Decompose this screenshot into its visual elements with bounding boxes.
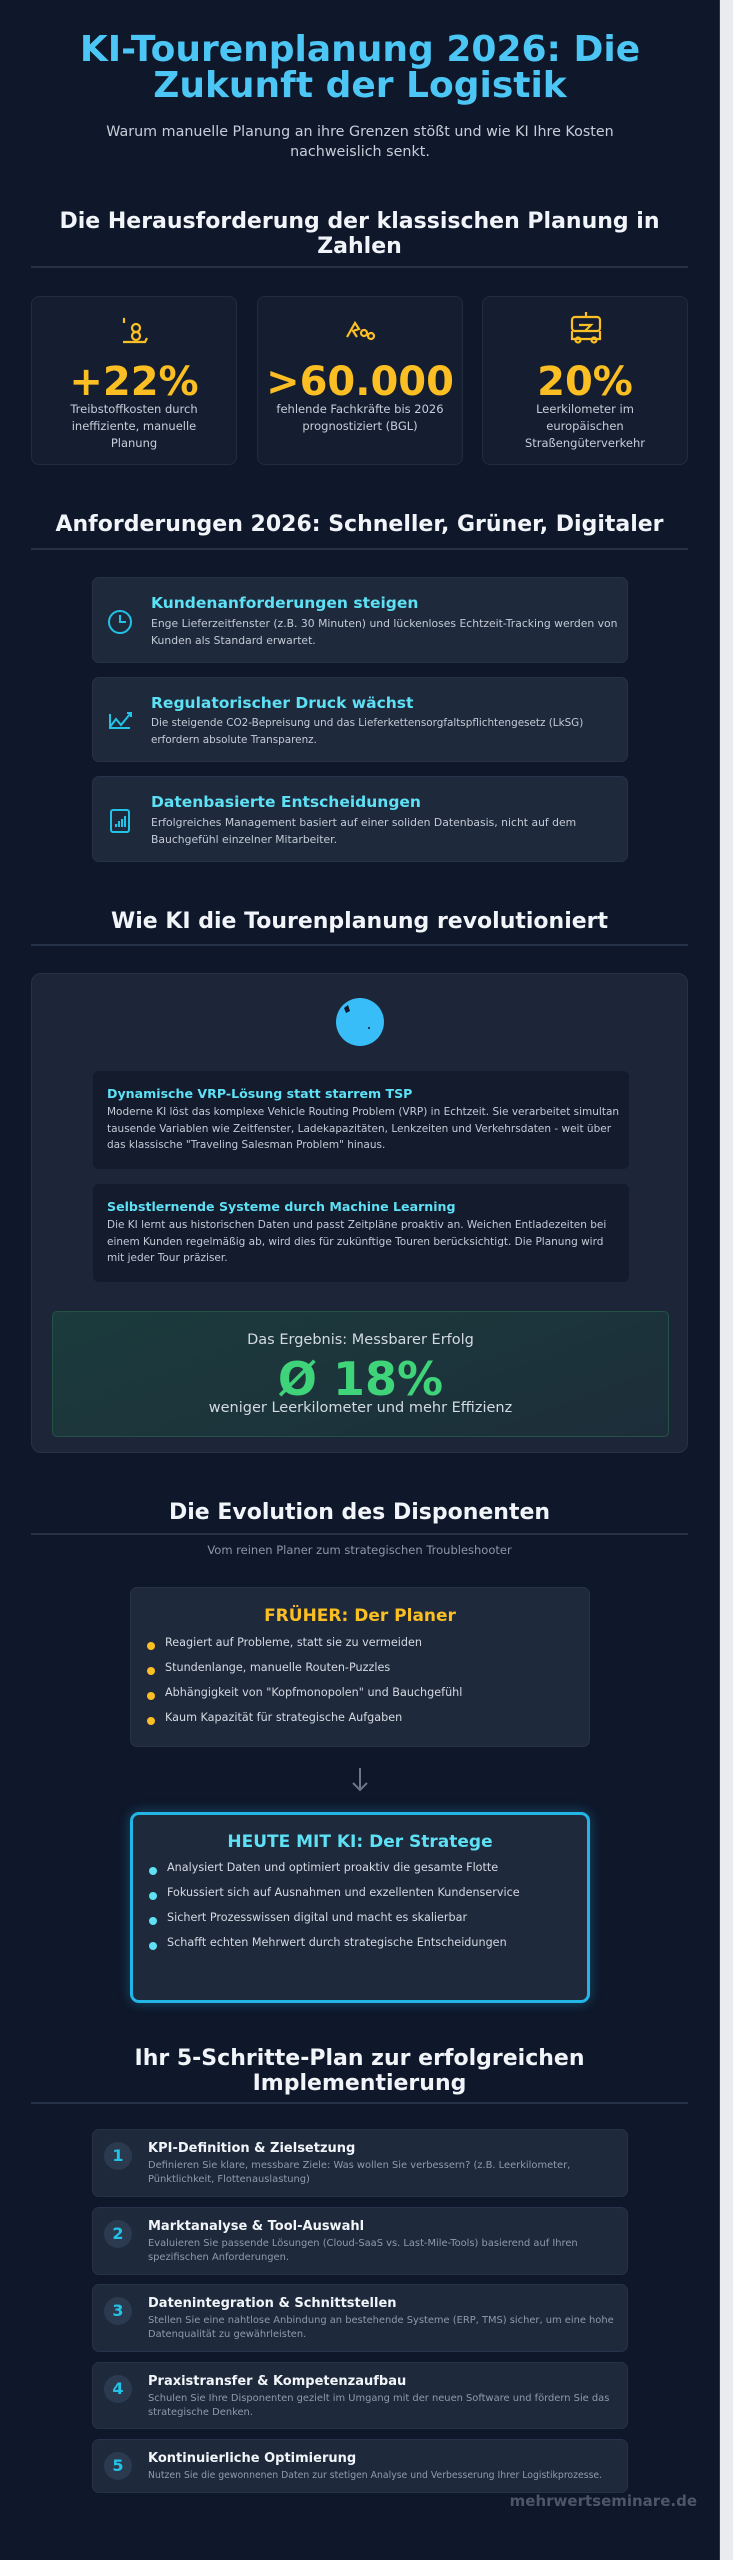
- step 1: [92, 2129, 628, 2197]
- footer brand: mehrwertseminare.de: [510, 2492, 697, 2510]
- step 5: Nutzen Sie die gewonnenen Daten zur stetigen Analyse und Verbesserung Ihrer Logistikprozesse.: [148, 2470, 602, 2481]
- title: KI-Tourenplanung 2026: Die: [80, 29, 640, 70]
- sub-card: Machine Learning: Die KI lernt aus historischen Daten und passt Zeitpläne proaktiv an. Weichen Entladezeiten bei einem Kunden regelmäßig ab, wird dies für zukünftige Touren berücksichtigt. Die Planung wird mit jeder Tour präziser.: [107, 1219, 606, 1264]
- step 3: Datenintegration & Schnittstellen: [148, 2296, 397, 2311]
- panel: früher: FRÜHER: Der Planer: [264, 1606, 456, 1626]
- panel: KI revolution: [31, 973, 688, 1453]
- title: Zukunft der Logistik: [153, 65, 567, 106]
- step 4: [92, 2362, 628, 2429]
- step 1: Definieren Sie klare, messbare Ziele: Was wollen Sie verbessern? (z.B. Leerkilometer, Pünktlichkeit, Flottenauslastung): [148, 2160, 570, 2184]
- callout: result: [52, 1311, 669, 1437]
- step 1: 1: [112, 2146, 124, 2165]
- req card 2: [92, 677, 628, 762]
- step 1: KPI-Definition & Zielsetzung: [148, 2141, 355, 2156]
- arrow: [352, 1768, 368, 1792]
- heading: Anforderungen: Anforderungen 2026: Schneller, Grüner, Digitaler: [55, 512, 664, 537]
- step 3: [92, 2284, 628, 2352]
- panel: heute: HEUTE MIT KI: Der Stratege: [227, 1832, 493, 1852]
- callout: result: Ø 18%: [278, 1352, 443, 1406]
- sub-card: Machine Learning: [93, 1184, 629, 1282]
- icon: truck: [570, 312, 602, 344]
- step 5: [92, 2439, 628, 2493]
- step 3: 3: [112, 2301, 124, 2320]
- evolution subtitle: Vom reinen Planer zum strategischen Troubleshooter: [207, 1543, 512, 1557]
- callout: result: Das Ergebnis: Messbarer Erfolg: [247, 1332, 474, 1348]
- panel: heute: Analysiert Daten und optimiert proaktiv die gesamte Flotte: [167, 1861, 498, 1874]
- step 2: [92, 2207, 628, 2275]
- title: [80, 29, 640, 106]
- heading: Evolution: Die Evolution des Disponenten: [169, 1500, 550, 1525]
- heading: Herausforderung: Die Herausforderung der klassischen Planung in Zahlen: [59, 209, 660, 259]
- panel: heute: Sichert Prozesswissen digital und macht es skalierbar: [167, 1911, 467, 1924]
- req card 1: [92, 577, 628, 663]
- subtitle: Warum manuelle Planung an ihre Grenzen stößt und wie KI Ihre Kosten nachweislich senkt.: [106, 124, 614, 160]
- step 5: 5: [112, 2456, 124, 2475]
- sub-card: VRP: Moderne KI löst das komplexe Vehicle Routing Problem (VRP) in Echtzeit. Sie verarbeitet simultan tausende Variablen wie Zeitfenster, Ladekapazitäten, Lenkzeiten und Verkehrsdaten - weit über das klassische "Traveling Salesman Problem" hinaus.: [107, 1106, 619, 1151]
- req title: Datenbasierte Entscheidungen: [151, 793, 421, 811]
- heading: Wie KI: Wie KI die Tourenplanung revolutioniert: [111, 909, 608, 934]
- icon: globe: [336, 998, 384, 1046]
- panel: früher: Stundenlange, manuelle Routen-Puzzles: [165, 1661, 390, 1674]
- callout: result: weniger Leerkilometer und mehr Effizienz: [209, 1400, 512, 1416]
- panel: früher: Abhängigkeit von "Kopfmonopolen" und Bauchgefühl: [165, 1686, 462, 1699]
- icon: clock: [108, 610, 132, 634]
- heading: 5 Schritte: Ihr 5-Schritte-Plan zur erfolgreichen Implementierung: [135, 2046, 584, 2096]
- stat card 2: [257, 296, 463, 465]
- stat number: 20%: [537, 359, 633, 405]
- step 4: 4: [112, 2379, 124, 2398]
- stat number: >60.000: [266, 359, 454, 405]
- step 5: Kontinuierliche Optimierung: [148, 2451, 356, 2466]
- step 2: Marktanalyse & Tool-Auswahl: [148, 2219, 364, 2234]
- icon: bars: [110, 809, 130, 833]
- sub-card: Machine Learning: Selbstlernende Systeme durch Machine Learning: [107, 1199, 456, 1214]
- sub-card: VRP: Dynamische VRP-Lösung statt starrem TSP: [107, 1086, 412, 1101]
- req title: Kundenanforderungen steigen: [151, 594, 418, 612]
- stat text: fehlende Fachkräfte bis 2026 prognostiziert (BGL): [276, 402, 444, 433]
- stat card 1: [31, 296, 237, 465]
- panel: früher: Reagiert auf Probleme, statt sie zu vermeiden: [165, 1636, 422, 1649]
- icon: fuel: [122, 318, 148, 344]
- stat card 3: [482, 296, 688, 465]
- stat text: Treibstoffkosten durch ineffiziente, manuelle Planung: [70, 402, 198, 450]
- step 2: Evaluieren Sie passende Lösungen (Cloud-SaaS vs. Last-Mile-Tools) basierend auf Ihren spezifischen Anforderungen.: [148, 2238, 578, 2262]
- step 4: Praxistransfer & Kompetenzaufbau: [148, 2374, 406, 2389]
- panel: heute: [130, 1812, 590, 2003]
- panel: heute: Schafft echten Mehrwert durch strategische Entscheidungen: [167, 1936, 507, 1949]
- panel: früher: Kaum Kapazität für strategische Aufgaben: [165, 1711, 402, 1724]
- req text: Erfolgreiches Management basiert auf einer soliden Datenbasis, nicht auf dem Bauchgefühl einzelner Mitarbeiter.: [151, 816, 576, 846]
- panel: früher: [130, 1587, 590, 1747]
- stat text: Leerkilometer im europäischen Straßengüterverkehr: [525, 402, 645, 450]
- req text: Die steigende CO2-Bepreisung und das Lieferkettensorgfaltspflichtengesetz (LkSG) erfordern absolute Transparenz.: [151, 717, 583, 746]
- step 2: 2: [112, 2224, 124, 2243]
- sub-card: VRP: [93, 1071, 629, 1169]
- panel: heute: Fokussiert sich auf Ausnahmen und exzellenten Kundenservice: [167, 1886, 520, 1899]
- req card 3: [92, 776, 628, 862]
- icon: workers: [346, 320, 376, 340]
- req text: Enge Lieferzeitfenster (z.B. 30 Minuten) und lückenloses Echtzeit-Tracking werden von Kunden als Standard erwartet.: [151, 617, 617, 647]
- req title: Regulatorischer Druck wächst: [151, 694, 413, 712]
- step 4: Schulen Sie Ihre Disponenten gezielt im Umgang mit der neuen Software und fördern Sie das strategische Denken.: [148, 2393, 609, 2418]
- icon: chart: [109, 712, 132, 729]
- step 3: Stellen Sie eine nahtlose Anbindung an bestehende Systeme (ERP, TMS) sicher, um eine hohe Datenqualität zu gewährleisten.: [148, 2315, 614, 2340]
- stat number: +22%: [69, 359, 199, 405]
